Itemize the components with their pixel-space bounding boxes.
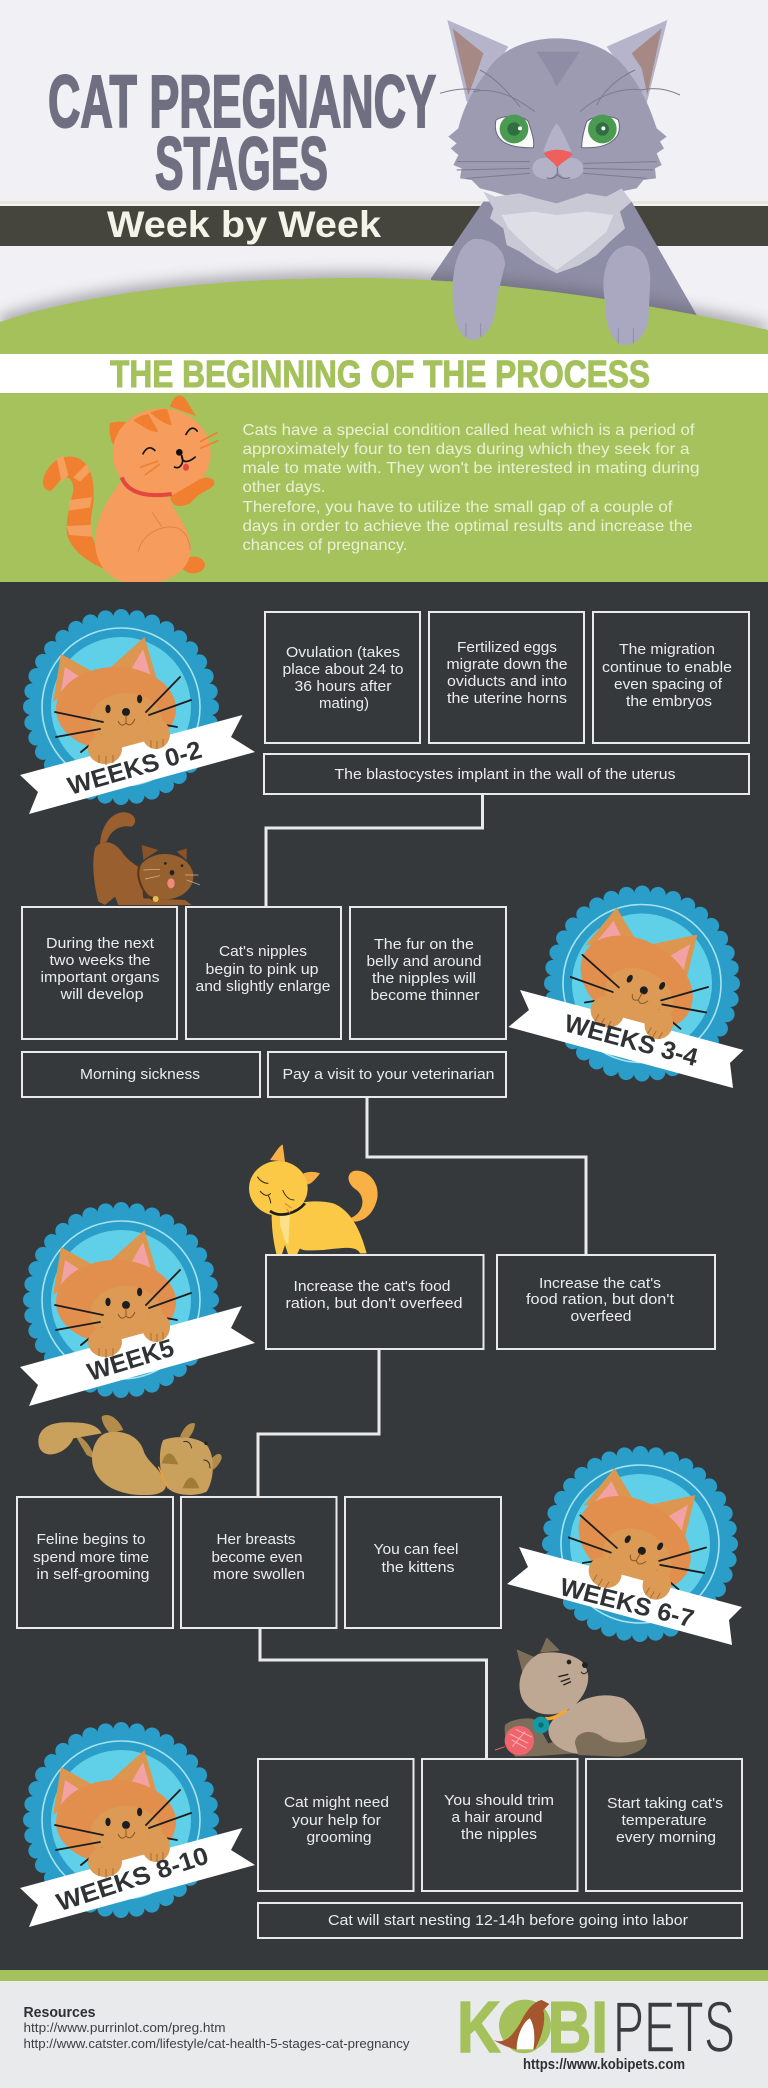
step text: will develop — [59, 986, 144, 1003]
green hill — [0, 272, 768, 354]
panel: weeks 6-7 — [17, 1449, 742, 1645]
step text: The migration — [619, 641, 715, 658]
badge: WEEKS 6-7 — [557, 1573, 697, 1633]
title: CAT PREGNANCY — [48, 60, 436, 143]
badge — [508, 889, 744, 1088]
step text: the kittens — [382, 1559, 454, 1576]
step text: Cat's nipples — [219, 943, 307, 960]
step boxes — [22, 907, 506, 1097]
cat chest — [483, 188, 632, 273]
cat muzzle and nose — [532, 123, 583, 179]
step text: important organs — [40, 969, 160, 986]
panel: introduction — [0, 393, 768, 584]
step boxes — [258, 1759, 742, 1938]
step text: become even — [212, 1549, 302, 1566]
badge — [507, 1449, 742, 1645]
icon: brown cat — [93, 812, 200, 905]
step text: and slightly enlarge — [196, 978, 330, 995]
icon: siamese cat with yarn — [495, 1637, 647, 1757]
step boxes — [17, 1497, 501, 1628]
step text: Fertilized eggs — [457, 639, 557, 656]
badge — [20, 1730, 255, 1927]
badge: WEEKS 0-2 — [65, 736, 205, 801]
step text: spend more time — [33, 1549, 149, 1566]
intro text: approximately four to ten days during which they seek for a — [242, 441, 690, 458]
step text: Cat might need — [284, 1794, 389, 1811]
step text: the nipples will — [372, 970, 476, 987]
cat eyes — [495, 115, 619, 148]
step text: ration, but don't overfeed — [286, 1295, 462, 1312]
step text: You can feel — [374, 1541, 458, 1558]
step text — [282, 639, 732, 783]
step text: temperature — [622, 1812, 706, 1829]
subtitle band: Week by Week — [107, 204, 381, 245]
resources: http://www.catster.com/lifestyle/cat-health-5-stages-cat-pregnancy — [24, 2036, 410, 2051]
step text: belly and around — [366, 953, 482, 970]
step text: The blastocystes implant in the wall of the uterus — [334, 766, 676, 783]
step text: mating) — [319, 695, 369, 712]
panel: weeks 0-2 — [20, 612, 749, 814]
step text: your help for — [292, 1812, 381, 1829]
badge: WEEK5 — [84, 1334, 177, 1387]
subtitle band — [0, 201, 768, 246]
step text: Her breasts — [216, 1531, 296, 1548]
section heading strip: THE BEGINNING OF THE PROCESS — [110, 354, 650, 396]
intro text: Therefore, you have to utilize the small gap of a couple of — [242, 499, 673, 516]
badge — [20, 1210, 255, 1406]
intro text — [242, 422, 700, 554]
step text: the uterine horns — [447, 690, 567, 707]
step text: every morning — [616, 1829, 716, 1846]
resources: http://www.purrinlot.com/preg.htm — [24, 2020, 226, 2035]
step boxes — [266, 1255, 715, 1349]
cat ears — [447, 20, 667, 103]
intro text: days in order to achieve the optimal results and increase the — [242, 518, 693, 535]
step text: During the next — [46, 935, 155, 952]
step text: Cat will start nesting 12-14h before going into labor — [328, 1912, 688, 1929]
intro text: chances of pregnancy. — [242, 537, 408, 554]
badge: WEEKS 8-10 — [53, 1842, 212, 1917]
step text: Pay a visit to your veterinarian — [282, 1066, 494, 1083]
step boxes — [264, 612, 749, 794]
step text: oviducts and into — [447, 673, 567, 690]
intro text: male to mate with. They won't be interested in mating during — [242, 460, 700, 477]
step text: Increase the cat's food — [294, 1278, 450, 1295]
icon: tan cat — [38, 1415, 222, 1495]
step text: in self-grooming — [36, 1566, 150, 1583]
logo: https://www.kobipets.com — [523, 2056, 685, 2073]
title: STAGES — [155, 122, 328, 205]
icon: orange cat — [43, 396, 218, 584]
cat paws — [453, 239, 650, 345]
dark timeline background — [0, 582, 768, 1970]
big grey cat — [440, 20, 680, 345]
resources: Resources — [24, 2004, 96, 2021]
big grey cat body — [431, 202, 697, 315]
panel: weeks 8-10 — [20, 1730, 742, 1938]
step text: The fur on the — [374, 936, 474, 953]
intro text: other days. — [242, 479, 326, 496]
step text: food ration, but don't — [526, 1291, 675, 1308]
step text: continue to enable — [602, 659, 732, 676]
intro text: Cats have a special condition called heat which is a period of — [242, 422, 695, 439]
step text: even spacing of — [614, 676, 723, 693]
step text: Feline begins to — [36, 1531, 146, 1548]
step text — [40, 935, 494, 1083]
step text: 36 hours after — [294, 678, 392, 695]
step text: two weeks the — [50, 952, 150, 969]
panel: week 5 — [20, 1210, 715, 1406]
badge — [20, 617, 255, 814]
step text — [286, 1275, 675, 1325]
logo — [457, 1988, 735, 2073]
step text: Increase the cat's — [539, 1275, 661, 1292]
step text: a hair around — [452, 1809, 542, 1826]
cat forehead mark — [537, 52, 580, 87]
step text — [284, 1792, 723, 1929]
step text: the nipples — [461, 1826, 537, 1843]
resources — [24, 2004, 410, 2051]
cat whiskers — [440, 70, 680, 178]
step text: the embryos — [626, 693, 712, 710]
panel: weeks 3-4 — [22, 889, 744, 1097]
step text: grooming — [306, 1829, 372, 1846]
step text: migrate down the — [446, 656, 568, 673]
step text: more swollen — [213, 1566, 305, 1583]
logo cats — [493, 2000, 551, 2052]
step text: begin to pink up — [206, 961, 318, 978]
footer — [0, 1970, 768, 2088]
step text: place about 24 to — [282, 661, 404, 678]
title — [48, 60, 436, 205]
step text: You should trim — [444, 1792, 554, 1809]
connectors between stages — [258, 794, 586, 1759]
step text: overfeed — [570, 1308, 632, 1325]
header background — [0, 0, 768, 354]
badge: WEEKS 3-4 — [561, 1010, 701, 1072]
step text — [33, 1531, 458, 1583]
logo: KOBI — [457, 1988, 608, 2068]
step text: Ovulation (takes — [286, 644, 400, 661]
step text: Start taking cat's — [607, 1795, 723, 1812]
step text: become thinner — [370, 987, 480, 1004]
cat head — [448, 38, 667, 203]
icon: yellow cat — [249, 1144, 378, 1255]
step text: Morning sickness — [80, 1066, 200, 1083]
